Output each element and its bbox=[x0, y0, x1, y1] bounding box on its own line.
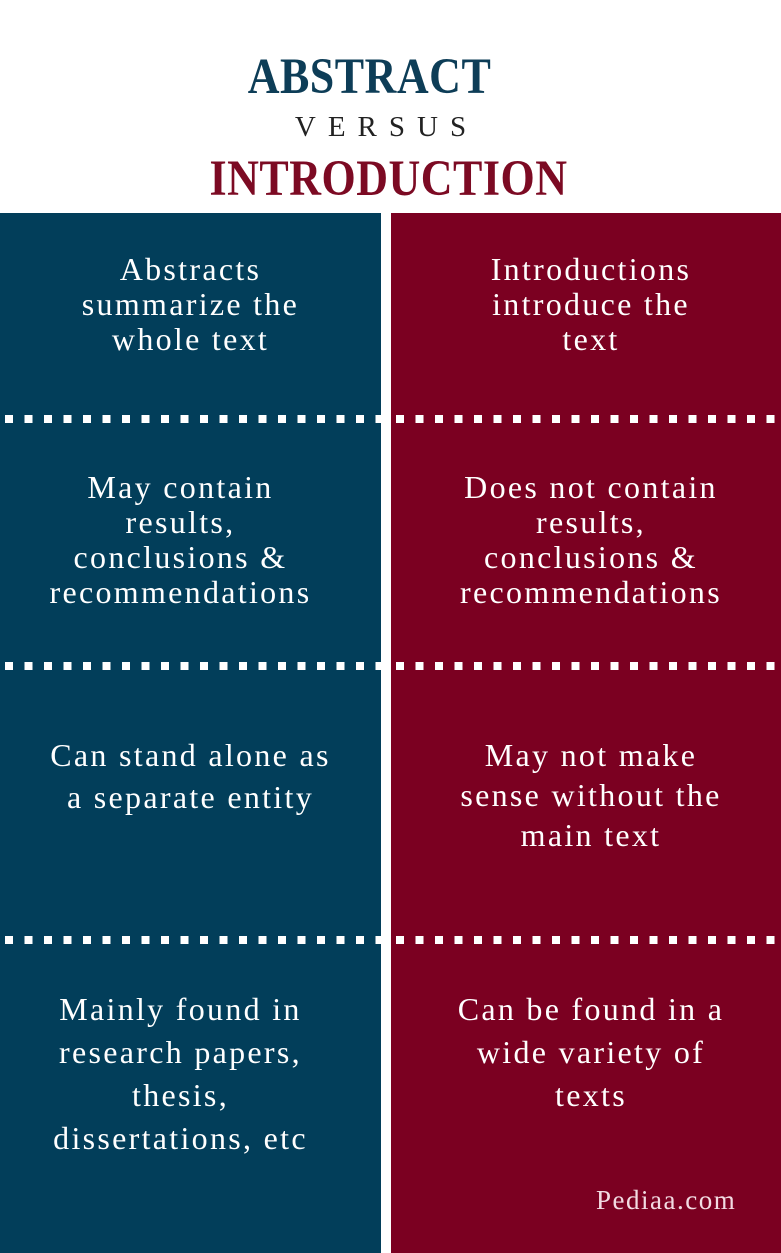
text: abstract row 2 bbox=[50, 469, 311, 610]
text: abstract row 3: Can stand alone as bbox=[50, 737, 331, 773]
text: abstract row 4: Mainly found in bbox=[59, 991, 302, 1027]
text: abstract row 4: thesis, bbox=[132, 1077, 229, 1113]
text: introduction row 3 bbox=[460, 737, 722, 853]
text: abstract row 1: summarize the bbox=[82, 286, 299, 322]
text: introduction row 2: Does not contain bbox=[464, 469, 718, 505]
text: abstract row 1: Abstracts bbox=[120, 251, 261, 287]
text: introduction row 1: Introductions bbox=[491, 251, 691, 287]
panel: introduction column bbox=[391, 213, 781, 1253]
text: introduction row 1 bbox=[491, 251, 691, 357]
text: introduction row 4: wide variety of bbox=[477, 1034, 705, 1070]
text: introduction row 2: results, bbox=[536, 504, 646, 540]
title: abstract: ABSTRACT bbox=[248, 48, 491, 105]
subtitle: versus: VERSUS bbox=[295, 111, 478, 143]
text: abstract row 4: dissertations, etc bbox=[53, 1120, 308, 1156]
text: abstract row 2: recommendations bbox=[50, 574, 311, 610]
text: introduction row 3: main text bbox=[521, 817, 661, 853]
text: introduction row 1: introduce the bbox=[492, 286, 690, 322]
text: abstract row 1 bbox=[82, 251, 299, 357]
text: abstract row 2: results, bbox=[126, 504, 235, 540]
panel: abstract column bbox=[0, 213, 381, 1253]
text: abstract row 1: whole text bbox=[112, 321, 269, 357]
text: introduction row 2: conclusions & bbox=[484, 539, 698, 575]
text: abstract row 3 bbox=[50, 737, 331, 815]
title: introduction: INTRODUCTION bbox=[209, 150, 568, 207]
text: introduction row 2: recommendations bbox=[460, 574, 722, 610]
logo: Pediaa.com: Pediaa.com bbox=[596, 1185, 736, 1215]
text: introduction row 2 bbox=[460, 469, 722, 610]
text: abstract row 2: May contain bbox=[87, 469, 274, 505]
text: introduction row 3: sense without the bbox=[460, 777, 722, 813]
text: introduction row 1: text bbox=[562, 321, 620, 357]
text: introduction row 4: Can be found in a bbox=[458, 991, 724, 1027]
text: introduction row 4 bbox=[458, 991, 724, 1113]
text: abstract row 4 bbox=[53, 991, 308, 1156]
text: abstract row 3: a separate entity bbox=[67, 779, 314, 815]
text: introduction row 3: May not make bbox=[485, 737, 697, 773]
text: abstract row 4: research papers, bbox=[59, 1034, 302, 1070]
text: abstract row 2: conclusions & bbox=[74, 539, 287, 575]
text: introduction row 4: texts bbox=[555, 1077, 627, 1113]
